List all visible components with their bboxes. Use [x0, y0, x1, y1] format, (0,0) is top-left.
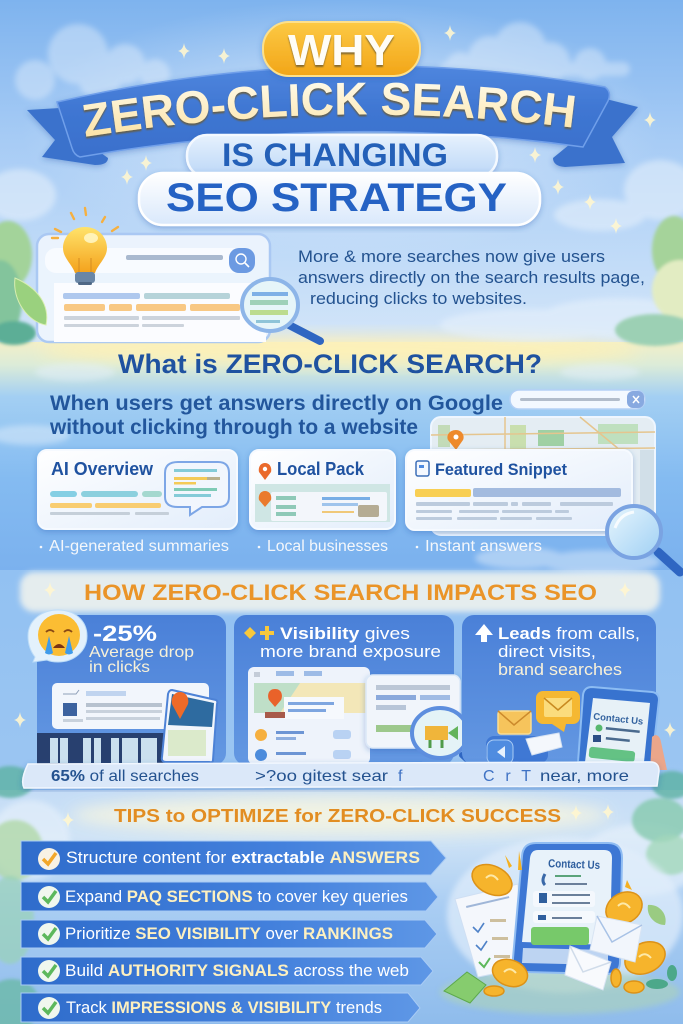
bottom bar: 65% of all searches	[51, 768, 199, 785]
why badge: WHY	[288, 26, 395, 75]
icon: diamond and plus	[244, 626, 274, 640]
icon: mail bubbles	[486, 691, 580, 764]
backdrop glow	[447, 837, 683, 993]
section: what is zero-click search	[38, 349, 680, 572]
result card	[54, 283, 266, 342]
leads text: Leads from calls,	[498, 624, 640, 643]
is changing pill	[187, 135, 497, 177]
tip 5: Track IMPRESSIONS & VISIBILITY trends	[66, 999, 382, 1017]
panel: visibility: more brand exposure	[260, 642, 441, 661]
leaves	[646, 905, 677, 989]
heading: What is ZERO-CLICK SEARCH?	[118, 349, 542, 379]
tip 5	[21, 993, 420, 1022]
tip 1	[21, 841, 446, 875]
captions: Local businesses	[267, 538, 388, 555]
icon: magnifier	[607, 506, 680, 572]
captions	[40, 538, 542, 555]
tip 1: Structure content for extractable ANSWERS	[66, 849, 420, 867]
banknote	[444, 972, 486, 1003]
seo strategy pill	[139, 173, 540, 225]
heading: HOW ZERO-CLICK SEARCH IMPACTS SEO	[84, 580, 597, 605]
card: ai overview	[38, 450, 237, 529]
captions: Instant answers	[425, 538, 542, 555]
panel: visibility	[234, 615, 475, 767]
coins	[467, 858, 670, 996]
panel: leads	[462, 615, 667, 770]
why badge	[263, 22, 420, 76]
search bar	[45, 248, 255, 273]
spark rays	[505, 851, 632, 890]
speech bubble	[165, 462, 229, 515]
storefront	[37, 733, 165, 764]
panel: leads: brand searches	[498, 660, 622, 679]
panel: clicks	[28, 610, 226, 765]
checklist	[455, 884, 522, 977]
tip 3	[21, 920, 437, 948]
card: featured snippet: Featured Snippet	[435, 460, 567, 479]
hand	[650, 735, 667, 770]
icon: leaf	[15, 278, 47, 325]
definition text: without clicking through to a website	[49, 416, 418, 439]
tip 2	[21, 882, 438, 911]
map panel	[431, 417, 655, 535]
ground	[440, 970, 680, 1014]
contact us label: Contact Us	[548, 858, 600, 872]
bushes	[0, 216, 683, 1024]
map card	[248, 667, 370, 764]
envelopes	[565, 916, 642, 990]
intro text: More & more searches now give users	[298, 247, 605, 266]
visibility text: Visibility gives	[280, 624, 410, 643]
section: how zero-click search impacts seo	[23, 580, 667, 788]
icon: up arrow	[475, 624, 493, 642]
tip 3: Prioritize SEO VISIBILITY over RANKINGS	[65, 925, 393, 943]
card: local pack: Local Pack	[277, 459, 365, 479]
search pill	[510, 390, 645, 409]
icon: magnifier	[412, 708, 475, 767]
panel: clicks: Average drop	[89, 644, 194, 661]
section: tips	[21, 805, 683, 1022]
panel: leads: direct visits,	[498, 642, 596, 661]
is changing pill: IS CHANGING	[222, 137, 448, 173]
phone	[513, 843, 622, 974]
bottom bar: C r T	[483, 768, 531, 785]
card: featured snippet	[406, 450, 632, 530]
sparkles	[14, 25, 676, 828]
result card	[52, 683, 209, 729]
search frame	[37, 234, 270, 342]
intro text: answers directly on the search results page,	[298, 268, 645, 287]
bottom bar: >?oo gitest sear	[255, 768, 389, 785]
card: ai overview: AI Overview	[51, 459, 154, 479]
bottom bar: f	[398, 768, 403, 785]
phone: contact us: Contact Us	[593, 711, 644, 728]
icon: crying emoji	[28, 610, 87, 662]
heading: TIPS to OPTIMIZE for ZERO-CLICK SUCCESS	[114, 805, 561, 826]
search illustration	[15, 208, 320, 342]
tip 2: Expand PAQ SECTIONS to cover key queries	[65, 888, 408, 906]
tip 4	[21, 957, 433, 985]
stat text: -25%	[93, 621, 157, 646]
snippet card	[366, 675, 460, 748]
icon: light bulb	[52, 208, 118, 285]
intro text	[298, 247, 645, 308]
definition text: When users get answers directly on Google	[50, 392, 503, 415]
zero-click search heading: ZERO-CLICK SEARCH	[82, 82, 576, 140]
definition text	[49, 392, 503, 439]
bottom bar	[23, 762, 659, 788]
intro text: reducing clicks to websites.	[310, 289, 527, 308]
phone: contact us	[578, 687, 659, 762]
card: local pack	[250, 450, 395, 529]
phone	[162, 690, 217, 762]
captions: AI-generated summaries	[49, 538, 229, 555]
title	[26, 20, 638, 232]
icon: magnifier	[242, 279, 320, 341]
ribbon banner	[27, 66, 638, 167]
tip 4: Build AUTHORITY SIGNALS across the web	[65, 962, 409, 980]
bottom bar: near, more	[540, 768, 629, 785]
illustration: contact phone and coins	[440, 837, 683, 1014]
panel: clicks: in clicks	[89, 659, 150, 676]
seo strategy pill: SEO STRATEGY	[166, 176, 507, 220]
